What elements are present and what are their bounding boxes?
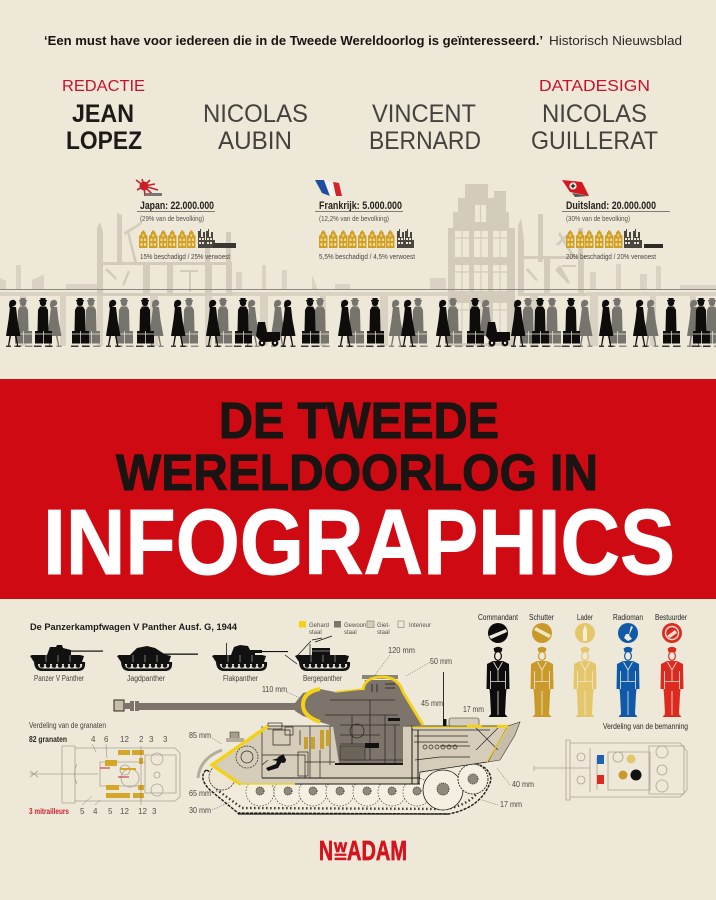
shell distribution diagram: 82 granaten — [29, 735, 67, 744]
crew distribution diagram — [534, 721, 688, 800]
numbers: 2 — [139, 735, 144, 744]
tank: Bergepanther — [285, 636, 350, 683]
publisher logo: ADAM — [347, 835, 407, 866]
front hull equipment — [236, 723, 335, 778]
statistic: Japan: 15% beschadigd / 25% verwoest — [140, 252, 231, 261]
armour thickness labels: 17 mm — [463, 705, 484, 714]
statistic: Japan: (29% van de bevolking) — [140, 214, 204, 223]
statistic: Japan: Japan: 22.000.000 — [140, 200, 214, 212]
crew column: Lader — [574, 613, 596, 717]
crew column: Commandant: Commandant — [478, 613, 519, 622]
author: Nicolas Guillerat — [531, 100, 658, 155]
legend: armour: Gehard — [309, 623, 329, 629]
title line 1: DE TWEEDE — [219, 392, 499, 449]
crew column: Bestuurder — [655, 613, 687, 717]
statistic: France: (12,2% van de bevolking) — [319, 214, 389, 223]
armour thickness labels: 45 mm — [421, 699, 443, 708]
tank: Bergepanther: Bergepanther — [303, 674, 342, 683]
lower street facade band — [0, 292, 716, 346]
black figures — [6, 298, 710, 347]
armour thickness labels — [189, 646, 534, 815]
numbers — [80, 735, 168, 816]
commander cupola — [362, 675, 398, 692]
small tanks row — [30, 636, 350, 683]
legend: armour: Giet- — [377, 623, 390, 629]
heading: Panther: De Panzerkampfwagen V Panther Ausf. G, 1944 — [30, 622, 238, 633]
publisher logo — [319, 835, 407, 866]
armour thickness labels: 120 mm — [388, 646, 415, 655]
statistic: Germany — [562, 180, 670, 261]
statistic: France — [315, 180, 416, 261]
main tank cutaway — [114, 672, 520, 814]
author: Nicolas Guillerat: GUILLERAT — [531, 127, 658, 155]
author: Nicolas Aubin — [203, 100, 308, 155]
prams — [256, 322, 280, 346]
interior shapes — [325, 700, 403, 763]
author: Jean Lopez: LOPEZ — [66, 127, 142, 155]
legend: armour — [299, 621, 431, 636]
pictogram: houses Japan — [139, 229, 236, 248]
numbers: 6 — [104, 735, 109, 744]
background city: ruins and canal house — [0, 184, 716, 346]
crew column: Lader: Lader — [577, 613, 593, 622]
shell distribution diagram: 3 mitrailleurs — [29, 807, 69, 816]
numbers: 3 — [163, 735, 168, 744]
publisher logo: W — [334, 839, 348, 855]
horizon line — [0, 289, 716, 290]
armour thickness labels: 40 mm — [512, 780, 534, 789]
tracks and wheels — [203, 763, 491, 814]
author: Jean Lopez — [66, 100, 142, 155]
shells — [304, 730, 330, 749]
author: Nicolas Aubin: NICOLAS — [203, 100, 308, 128]
flag: Germany — [562, 180, 589, 197]
pictogram: houses Germany — [566, 229, 663, 248]
flag: Japan — [136, 179, 163, 196]
armour thickness labels: 85 mm — [189, 731, 211, 740]
hull floor lines — [240, 726, 420, 784]
statistic: France: 5,5% beschadigd / 4,5% verwoest — [319, 252, 416, 261]
title line 2: WERELDOORLOG IN — [116, 444, 598, 501]
tank: Flakpanther: Flakpanther — [223, 674, 258, 683]
front idler — [209, 764, 235, 790]
shell racks — [105, 750, 144, 798]
armour thickness labels: 17 mm — [500, 800, 522, 809]
tank: Jagdpanther — [117, 646, 198, 683]
crew column: Schutter — [529, 613, 554, 717]
armour thickness labels: 30 mm — [189, 806, 211, 815]
statistic: France: Frankrijk: 5.000.000 — [319, 200, 402, 212]
author: Vincent Bernard: VINCENT — [372, 100, 476, 128]
pictogram: houses France — [319, 229, 414, 248]
title banner — [0, 379, 716, 599]
author: Nicolas Aubin: AUBIN — [218, 127, 292, 155]
author: Vincent Bernard — [369, 100, 481, 155]
legend: armour: Gewoon — [344, 623, 366, 629]
legend: armour: staal — [377, 630, 390, 636]
statistic: Germany: Duitsland: 20.000.000 — [566, 200, 656, 212]
gun barrel — [114, 700, 299, 711]
crew distribution diagram: Verdeling van de bemanning — [603, 721, 688, 731]
statistic: Germany: 20% beschadigd / 20% verwoest — [566, 252, 657, 261]
canal house — [448, 184, 515, 346]
legend: armour: staal — [309, 630, 322, 636]
grey figures — [14, 298, 716, 347]
numbers: 5 — [80, 807, 85, 816]
armour thickness labels: 65 mm — [189, 789, 211, 798]
shell distribution diagram: Verdeling van de granaten — [29, 721, 106, 730]
ruin left — [97, 213, 232, 296]
quote line: ‘Een must have voor iedereen die in de Tweede Wereldoorlog is geïnteresseerd.’ — [44, 34, 543, 48]
row of refugees walking — [6, 298, 716, 347]
crew column: Schutter: Schutter — [529, 613, 554, 622]
numbers: 4 — [91, 735, 96, 744]
crew column: Commandant — [478, 613, 519, 717]
armour thickness labels: 110 mm — [262, 685, 287, 694]
statistic: Germany: (30% van de bevolking) — [566, 214, 630, 223]
author: Vincent Bernard: BERNARD — [369, 127, 481, 155]
numbers: 3 — [152, 807, 157, 816]
crew column: Radioman — [613, 613, 643, 717]
crew column: Bestuurder: Bestuurder — [655, 613, 687, 622]
quote line: Historisch Nieuwsblad — [549, 34, 682, 48]
numbers: 12 — [138, 807, 147, 816]
crew positions — [597, 755, 604, 764]
driver — [266, 754, 286, 771]
flag: France — [315, 180, 342, 196]
numbers: 3 — [149, 735, 154, 744]
tank: Flakpanther — [212, 643, 288, 683]
ruin right — [518, 214, 586, 296]
label: datadesign: DATADESIGN — [539, 78, 650, 95]
numbers: 4 — [93, 807, 98, 816]
numbers: 5 — [108, 807, 113, 816]
label: redactie: REDACTIE — [62, 78, 145, 95]
crew column: Radioman: Radioman — [613, 613, 643, 622]
author: Nicolas Guillerat: NICOLAS — [542, 100, 647, 128]
front fender and hatch — [198, 732, 244, 778]
publisher logo: N — [319, 835, 333, 866]
tank: Panzer V Panther: Panzer V Panther — [34, 674, 84, 683]
tank: Panzer V Panther — [30, 645, 103, 683]
author: Jean Lopez: JEAN — [72, 100, 134, 128]
armour thickness labels: 50 mm — [430, 657, 452, 666]
tank: Jagdpanther: Jagdpanther — [127, 674, 165, 683]
legend: armour: staal — [344, 630, 357, 636]
hardened armour lines — [212, 677, 508, 784]
distant ruined skyline — [0, 264, 716, 290]
shell distribution diagram — [29, 721, 180, 816]
legend: armour: Interieur — [409, 623, 431, 629]
hull interior — [212, 726, 508, 784]
rear deck details — [488, 722, 520, 762]
numbers: 12 — [120, 735, 129, 744]
numbers: 12 — [120, 807, 129, 816]
top view tank — [30, 746, 180, 803]
statistic: Japan — [136, 179, 236, 261]
authors block — [62, 78, 658, 155]
turret and fighting compartment — [295, 680, 423, 763]
